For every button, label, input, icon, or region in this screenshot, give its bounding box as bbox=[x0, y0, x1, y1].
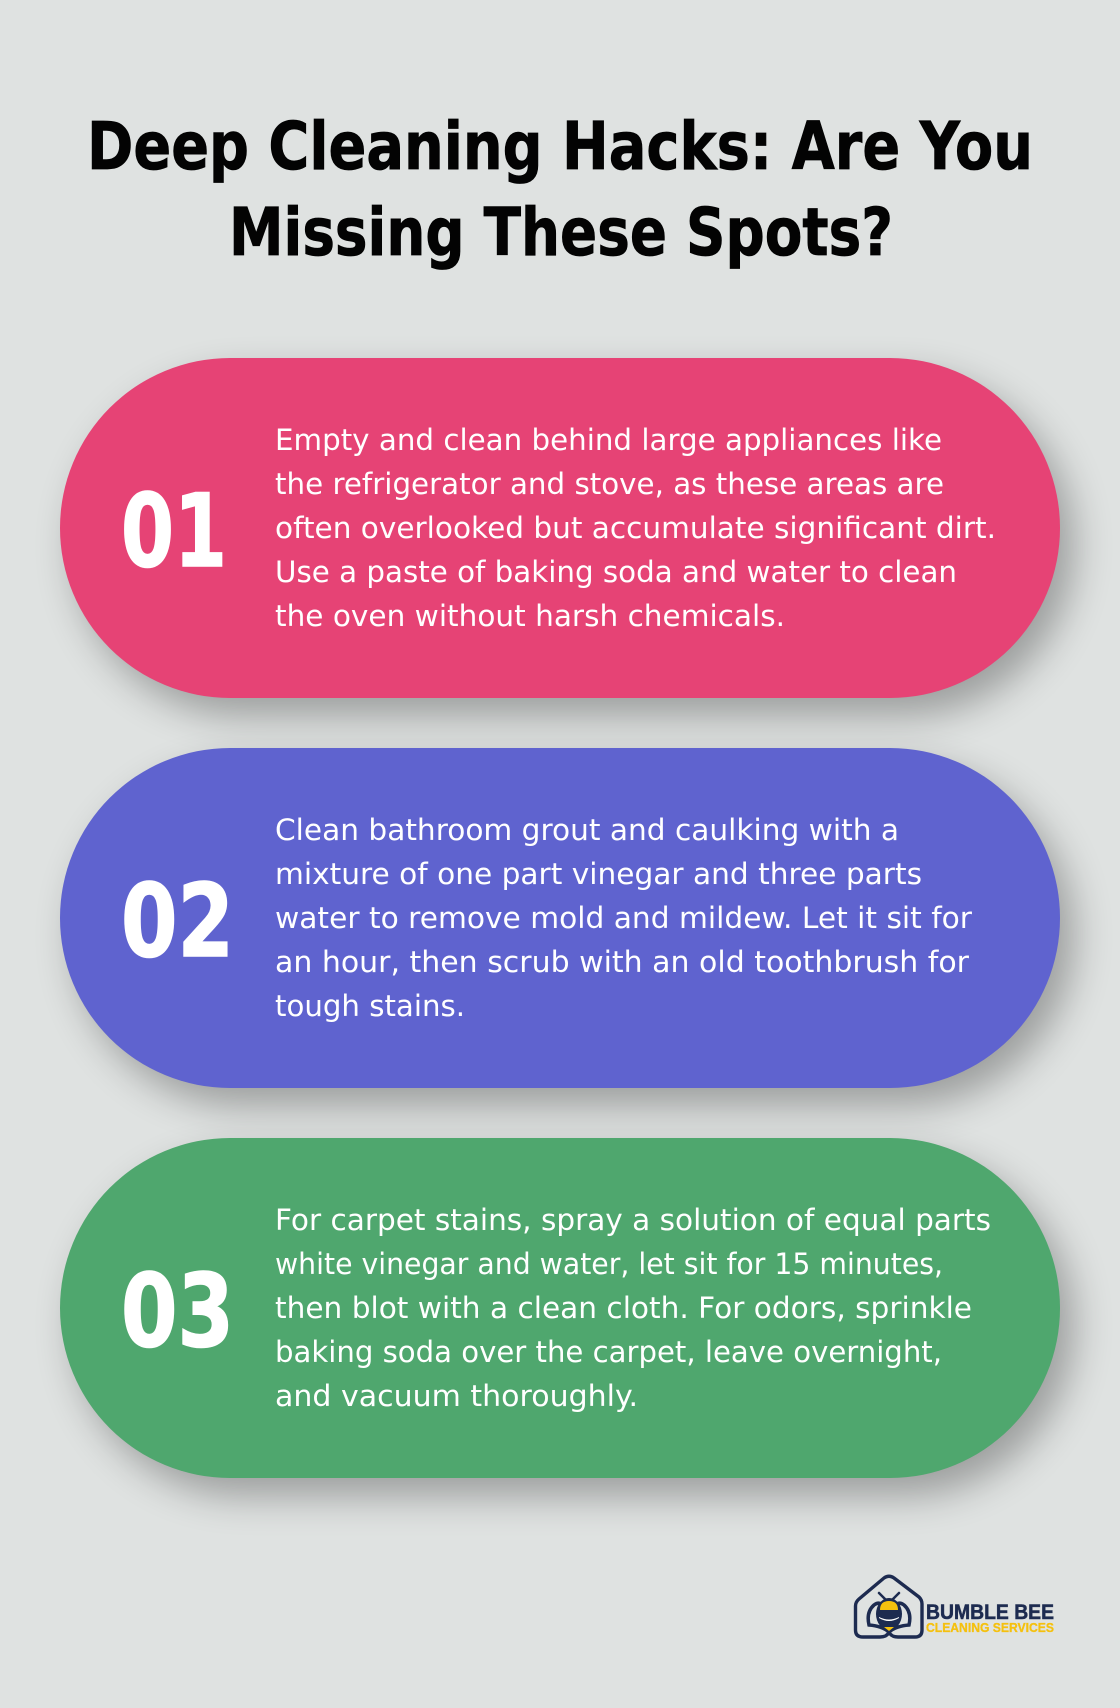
text block: step 01: Empty and clean behind large appliances like bbox=[275, 423, 942, 457]
text block: step 03: then blot with a clean cloth. For odors, sprinkle bbox=[275, 1291, 972, 1325]
number 03: 03 bbox=[121, 1252, 234, 1370]
text block: step 03: For carpet stains, spray a solution of equal parts bbox=[275, 1203, 991, 1237]
text block: step 02: Clean bathroom grout and caulking with a bbox=[275, 813, 899, 847]
text block: step 02: water to remove mold and mildew. Let it sit for bbox=[275, 901, 973, 935]
text block: step 02: mixture of one part vinegar and three parts bbox=[275, 857, 922, 891]
title bbox=[87, 108, 1033, 271]
icon: house with bee bbox=[856, 1576, 922, 1637]
number 02: 02 bbox=[121, 862, 234, 980]
title: Missing These Spots? bbox=[229, 194, 893, 271]
panel: step 03 bbox=[60, 1138, 1060, 1478]
text block: step 02 bbox=[275, 813, 973, 1023]
text block: step 03: baking soda over the carpet, leave overnight, bbox=[275, 1335, 942, 1369]
text block: step 03 bbox=[275, 1203, 991, 1413]
panel: step 01 bbox=[60, 358, 1060, 698]
tagline: CLEANING SERVICES bbox=[926, 1621, 1054, 1635]
text block: step 03: and vacuum thoroughly. bbox=[275, 1379, 638, 1413]
text block: step 02: an hour, then scrub with an old toothbrush for bbox=[275, 945, 970, 979]
text block: step 01 bbox=[275, 423, 996, 633]
text block: step 01: the oven without harsh chemicals. bbox=[275, 599, 785, 633]
text block: step 01: often overlooked but accumulate significant dirt. bbox=[275, 511, 996, 545]
number 01: 01 bbox=[121, 472, 227, 590]
text block: step 01: the refrigerator and stove, as these areas are bbox=[275, 467, 944, 501]
panel: step 02 bbox=[60, 748, 1060, 1088]
text block: step 01: Use a paste of baking soda and water to clean bbox=[275, 555, 957, 589]
text block: step 02: tough stains. bbox=[275, 989, 465, 1023]
logo: Bumble Bee Cleaning Services bbox=[854, 1574, 1054, 1639]
text block: step 03: white vinegar and water, let sit for 15 minutes, bbox=[275, 1247, 943, 1281]
